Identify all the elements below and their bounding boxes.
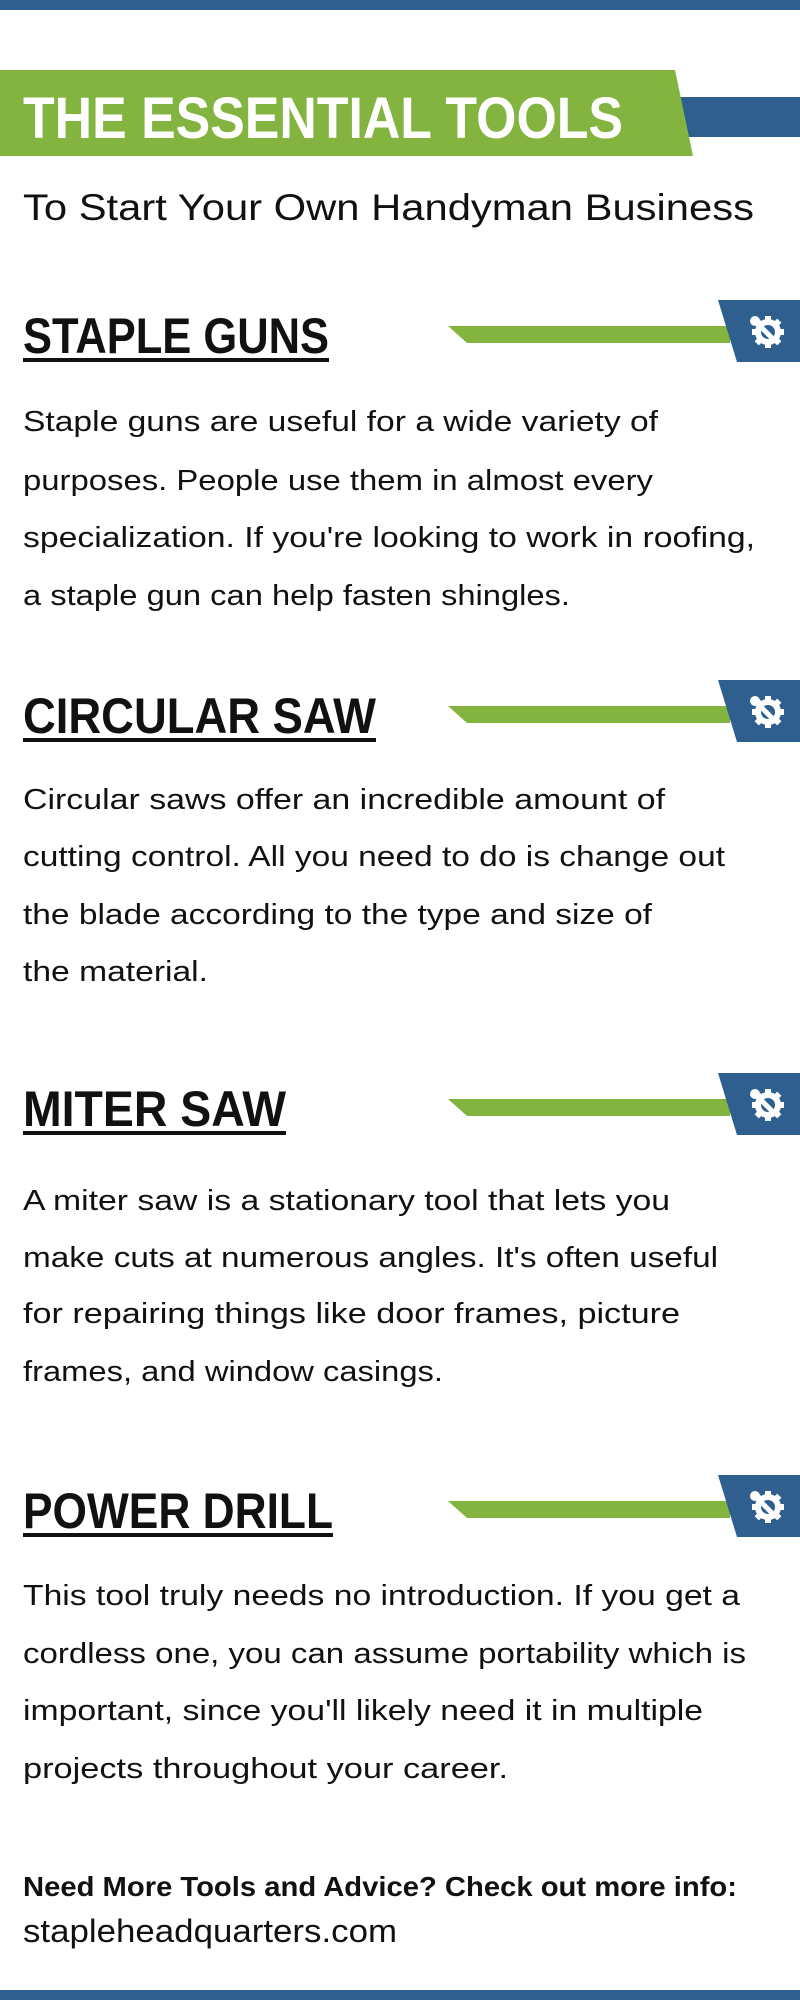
body text: make cuts at numerous angles. It's often useful [23,1242,718,1274]
body text: the material. [23,956,208,988]
stripe and icon tag [448,1073,800,1135]
body text: a staple gun can help fasten shingles. [23,580,570,612]
section: miter saw [23,1073,800,1388]
body text: important, since you'll likely need it in multiple [23,1695,703,1727]
subtitle: To Start Your Own Handyman Business [23,187,754,228]
stripe and icon tag [448,1475,800,1537]
body text [23,406,755,612]
stripe and icon tag [448,680,800,742]
heading: power drill: POWER DRILL [23,1483,333,1539]
body text: A miter saw is a stationary tool that lets you [23,1185,670,1217]
body text: specialization. If you're looking to work in roofing, [23,522,755,554]
section: power drill [23,1475,800,1785]
heading: miter saw: MITER SAW [23,1081,287,1137]
body text: This tool truly needs no introduction. If you get a [23,1580,741,1612]
body text: frames, and window casings. [23,1356,443,1388]
heading: circular saw: CIRCULAR SAW [23,688,377,744]
title banner: THE ESSENTIAL TOOLS [23,86,623,151]
body text: purposes. People use them in almost every [23,465,654,497]
top bar [0,0,800,10]
body text: cutting control. All you need to do is change out [23,841,725,873]
stripe and icon tag [448,300,800,362]
title banner [0,70,800,156]
body text [23,1185,718,1388]
body text: Staple guns are useful for a wide variety of [23,406,659,438]
body text [23,784,725,988]
section: staple guns [23,300,800,612]
heading: staple guns: STAPLE GUNS [23,308,329,364]
body text: projects throughout your career. [23,1753,508,1785]
body text: for repairing things like door frames, picture [23,1298,680,1330]
body text: cordless one, you can assume portability which is [23,1638,746,1670]
body text [23,1580,746,1785]
bottom bar [0,1990,800,2000]
footer text: stapleheadquarters.com [23,1913,397,1949]
body text: the blade according to the type and size of [23,899,653,931]
body text: Circular saws offer an incredible amount of [23,784,666,816]
footer text [23,1871,737,1949]
footer text: Need More Tools and Advice? Check out more info: [23,1871,737,1902]
section: circular saw [23,680,800,988]
